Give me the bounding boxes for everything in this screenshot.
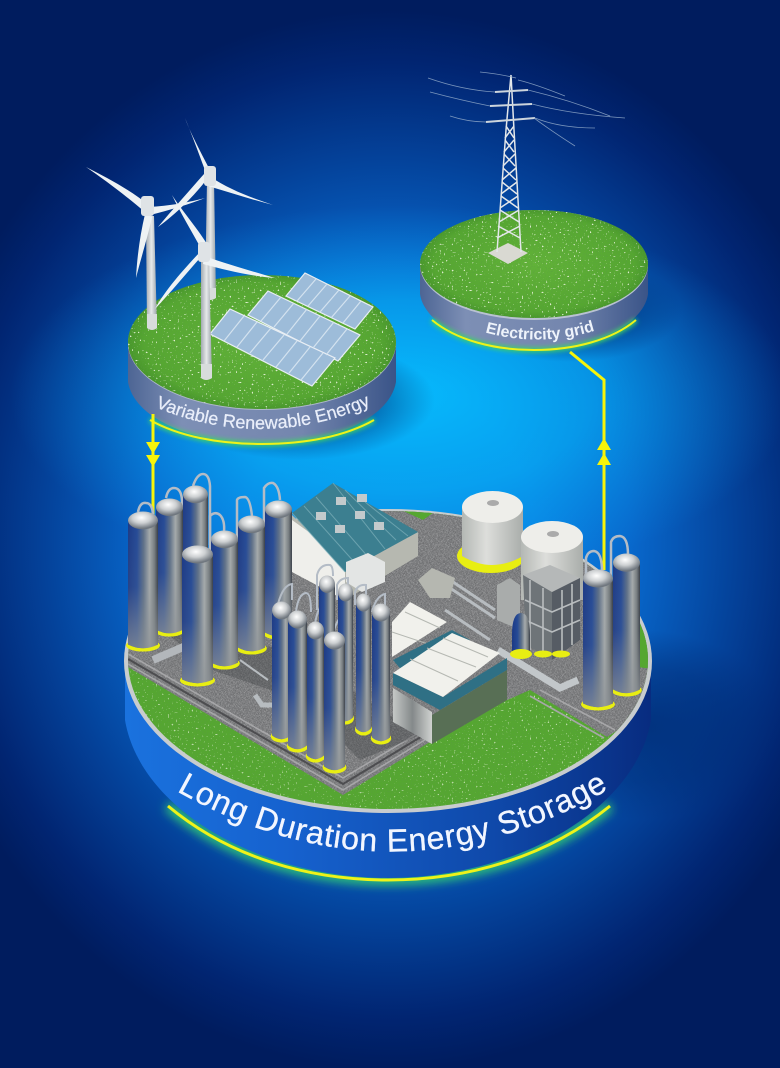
- icon: turbine front: [155, 195, 275, 380]
- roof back: [392, 602, 447, 657]
- platform shadow: [500, 630, 780, 820]
- heading: variable renewable energy: Variable Renewable Energy: [160, 396, 368, 430]
- panel: long duration energy storage platform: [124, 493, 736, 892]
- building: white roof hall: [392, 602, 507, 744]
- pad shadows: [160, 628, 420, 760]
- gas cylinders: left group: [126, 474, 294, 687]
- paved area: [128, 511, 648, 795]
- icon: turbine left: [86, 167, 205, 330]
- icon: wind turbines: [86, 118, 275, 380]
- storage tanks: [457, 491, 583, 660]
- icon: second tank on frame: [521, 521, 583, 660]
- building: teal roof hall: [292, 483, 418, 600]
- panel: variable renewable energy disk: [128, 275, 428, 456]
- gas cylinders: right group: [581, 536, 642, 711]
- arrow: storage to grid: [570, 352, 611, 570]
- platform rim glow: [168, 806, 610, 880]
- heading: electricity grid: Electricity grid: [486, 320, 594, 342]
- background glow: [10, 205, 780, 585]
- platform side: [125, 660, 651, 878]
- gas cylinders: centre group: [271, 565, 391, 774]
- arrow: renewable to storage: [146, 414, 160, 524]
- panel: electricity grid disk: [420, 210, 668, 358]
- icon: large tank: [457, 491, 525, 573]
- icon: turbine back: [158, 118, 273, 300]
- heading: long duration energy storage: Long Duration Energy Storage: [178, 772, 606, 852]
- equipment and pipes: [153, 568, 578, 705]
- icon: solar panels: [210, 273, 373, 386]
- platform top: [124, 509, 652, 813]
- icon: transmission tower: [428, 72, 625, 264]
